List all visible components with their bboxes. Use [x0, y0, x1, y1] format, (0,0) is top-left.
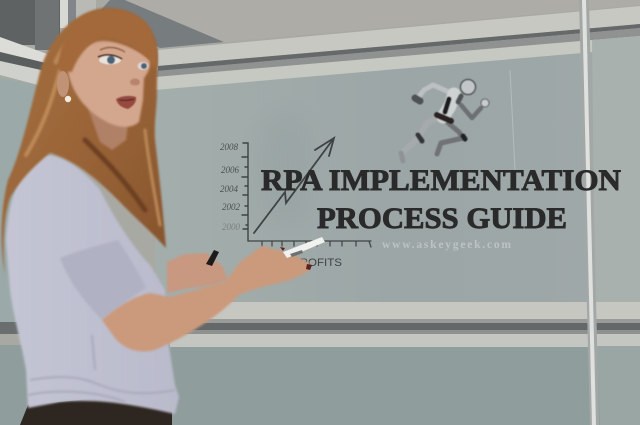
person: eyes, nose and lips: [98, 47, 148, 109]
person: forearm and pointing hand: [102, 246, 311, 352]
person: sleeve: [60, 240, 146, 320]
chart year labels: 2004: [220, 184, 238, 194]
chart drawn on glass: [242, 138, 371, 247]
growth arrow: [254, 138, 334, 233]
left window frame: [0, 37, 50, 88]
person: hair highlights: [26, 16, 160, 225]
glass panel: main board: [155, 38, 640, 305]
glass panel: left: [0, 78, 50, 330]
person: neck: [88, 108, 128, 150]
glass panel: lower: [0, 345, 640, 425]
top window frame: [155, 6, 640, 90]
icon: black pen in hand: [206, 250, 219, 266]
chart axis label: PROFITS: [292, 257, 342, 269]
title: PROCESS GUIDE: [317, 203, 567, 235]
title: RPA IMPLEMENTATION: [261, 165, 621, 197]
website watermark: www.askeygeek.com: [382, 239, 511, 251]
chart year labels: [220, 142, 240, 232]
person: ear and pearl earring: [57, 71, 71, 102]
chart year labels: 2002: [222, 202, 240, 212]
icon: running robot: [401, 80, 489, 161]
person: shirt folds: [28, 335, 175, 402]
person: long auburn hair: [2, 8, 166, 275]
person: face: [68, 41, 150, 127]
person: trousers: [20, 398, 172, 425]
fingernails: [280, 247, 312, 270]
y axis with ticks: [242, 143, 248, 241]
chart year labels: 2006: [221, 165, 240, 175]
chart year labels: 2000: [222, 222, 240, 232]
person: fringe: [58, 9, 157, 72]
chart year labels: 2008: [220, 142, 238, 152]
vertical mullion: [510, 0, 640, 425]
reflection on glass: [255, 110, 315, 230]
title: [261, 165, 621, 235]
x axis with ticks: [248, 241, 371, 247]
person: shirt: [6, 155, 179, 414]
bottom window frame: [0, 302, 640, 347]
icon: white marker: [283, 237, 325, 258]
person: left hand: [167, 253, 228, 293]
